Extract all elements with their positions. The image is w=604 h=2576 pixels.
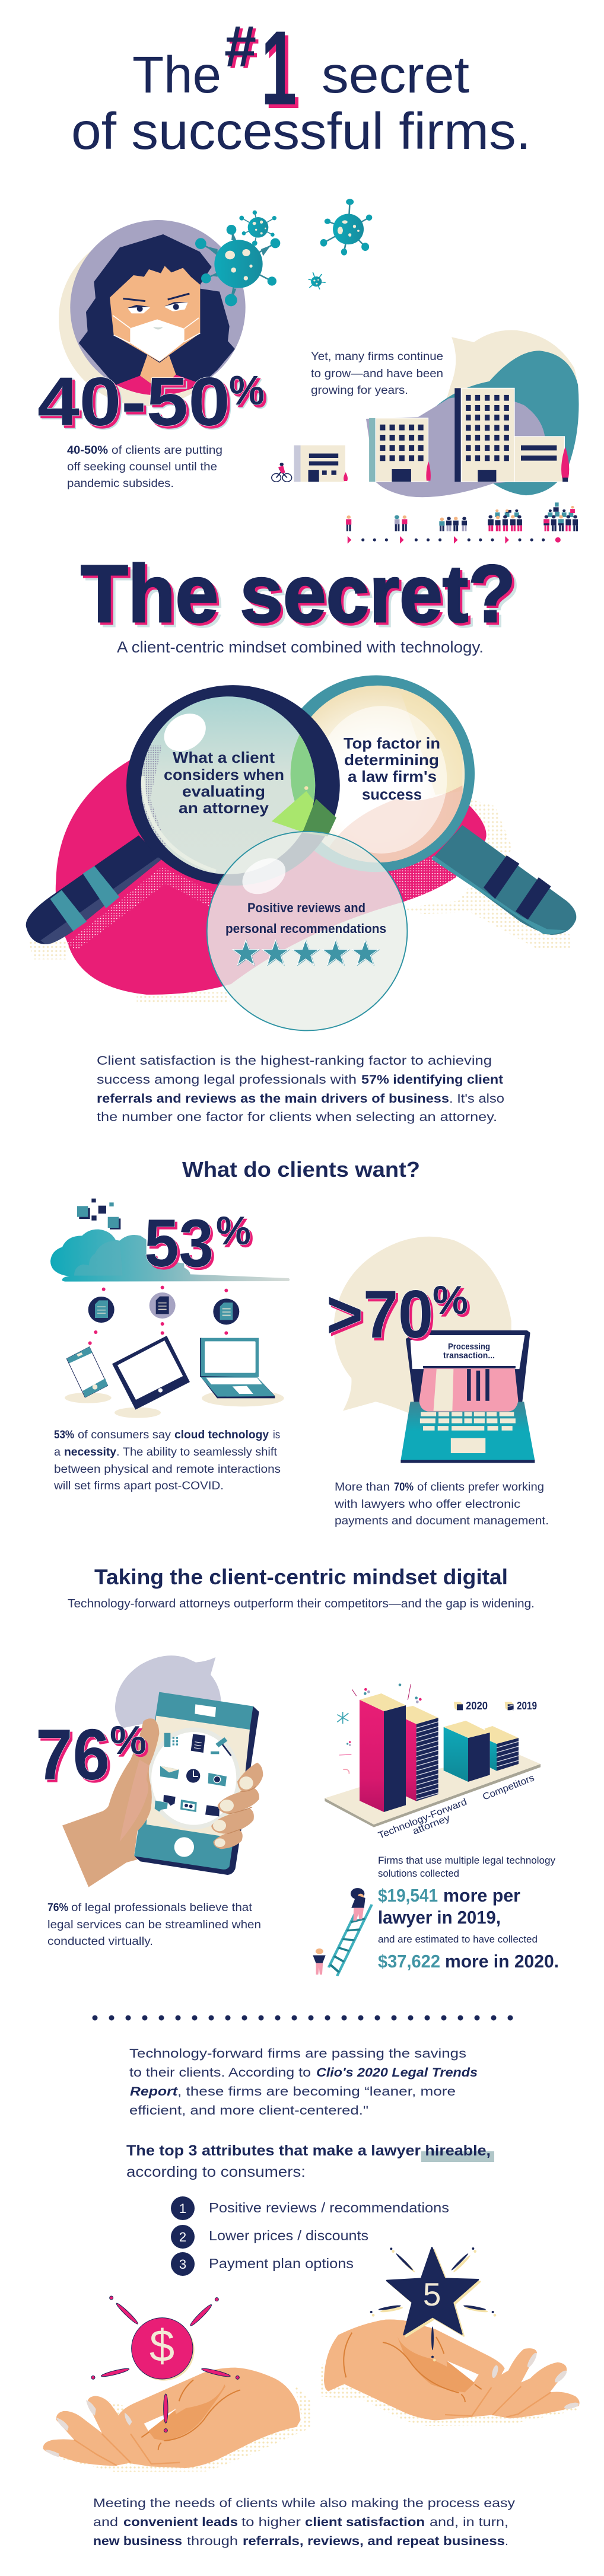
text: 70% of clients: of clients prefer working — [417, 1481, 544, 1494]
text: client satisfaction paragraph: . It's also — [449, 1092, 504, 1106]
text: collection amounts: lawyer in 2019, — [378, 1907, 501, 1928]
magnifier: right lens label — [344, 734, 440, 803]
icon: virus tiny — [309, 272, 326, 289]
illustration: woman in mask — [59, 220, 246, 406]
text: collection amounts: solutions collected — [378, 1868, 459, 1879]
magnifier: right lens label: a law firm's — [348, 768, 437, 785]
blob background — [29, 746, 570, 1002]
text: collection amounts: Firms that use multiple legal technology — [378, 1855, 555, 1866]
bar chart: collections 2019 vs 2020 — [325, 1683, 541, 1841]
magnifier: right lens label: success — [362, 785, 422, 803]
illustration: hand with star — [319, 2247, 580, 2426]
stat: >70%: % — [433, 1278, 468, 1323]
icon: phone — [65, 1347, 112, 1403]
text: client satisfaction paragraph: referrals and reviews as the main drivers of business — [97, 1092, 449, 1106]
heading: The secret?: The secret? — [81, 549, 516, 639]
text: 53% cloud technology: between physical and remote interactions — [54, 1463, 281, 1476]
text: closing paragraph: convenient leads — [123, 2515, 238, 2529]
magnifier: right lens — [276, 676, 576, 935]
text: closing paragraph: Meeting the needs of clients while also making the process easy — [93, 2497, 516, 2510]
text: 76% of legal professionals: 76% — [47, 1902, 68, 1914]
laptop screen label: Processing — [448, 1342, 490, 1352]
illustration: hand with coin — [43, 2296, 310, 2472]
illustration: hand holding phone — [36, 1655, 263, 1887]
text: firms continue to grow — [311, 351, 443, 397]
text: client satisfaction paragraph: Client satisfaction is the highest-ranking factor to achieving — [97, 1054, 492, 1068]
text: 70% of clients: 70% — [394, 1481, 414, 1494]
icon: dollar coin: $ — [150, 2321, 174, 2371]
title number one: 1 — [261, 9, 297, 127]
icon: cloud — [50, 1230, 290, 1282]
text: 53% cloud technology: will set firms apart post-COVID. — [53, 1480, 224, 1492]
icon: tablet — [112, 1336, 190, 1418]
speech bubble — [115, 1655, 221, 1728]
title hash mark: # — [224, 14, 256, 79]
text: closing paragraph — [93, 2497, 516, 2548]
text: closing paragraph: referrals, reviews, and repeat business — [243, 2534, 505, 2548]
laptop screen label — [443, 1342, 495, 1361]
icon: cyclist — [272, 463, 292, 482]
text: firms continue to grow: growing for years. — [311, 384, 408, 397]
legend swatches — [454, 1702, 514, 1710]
list: top 3 attributes — [171, 2196, 449, 2276]
text: collection amounts: and are estimated to have collected — [378, 1934, 538, 1945]
text: collection amounts: more in 2020. — [445, 1951, 559, 1972]
text: closing paragraph: through — [187, 2534, 238, 2548]
confetti marks — [337, 1683, 422, 1774]
heading: Taking the client-centric mindset digital: Taking the client-centric mindset digital — [94, 1565, 508, 1589]
text: collection amounts: $37,622 — [378, 1951, 440, 1972]
illustration: laptop payment — [326, 1237, 535, 1463]
legend labels: 2019 — [517, 1700, 537, 1712]
text: 70% of clients: with lawyers who offer electronic — [334, 1498, 520, 1511]
icon: virus large — [195, 225, 280, 306]
axis labels — [377, 1773, 536, 1841]
icon: floating chips — [77, 1199, 120, 1230]
stat: 40-50%: % — [229, 367, 265, 413]
legend labels: 2020 — [466, 1700, 488, 1712]
text: 53% cloud technology: . The ability to seamlessly shift — [116, 1446, 278, 1459]
axis labels: Competitors — [481, 1773, 536, 1803]
icon: virus small — [239, 211, 276, 246]
text: 76% of legal professionals — [47, 1902, 261, 1948]
bar: competitors 2020 — [444, 1721, 490, 1782]
speech bubble — [333, 1237, 511, 1413]
text: clients putting off counsel: off seeking counsel until the — [67, 461, 217, 473]
list: top 3 attributes: Lower prices / discounts — [209, 2228, 368, 2243]
magnifier: left lens — [26, 685, 340, 944]
list: top 3 attributes: 1 — [179, 2201, 186, 2216]
text: 70% of clients: More than — [335, 1481, 390, 1494]
text: 53% cloud technology — [53, 1429, 281, 1492]
bar: competitors 2019 — [485, 1726, 519, 1771]
text: 53% cloud technology: 53% — [54, 1429, 74, 1441]
stat: 76%: 76 — [36, 1714, 110, 1795]
magnifier: bottom lens label: Positive reviews and — [247, 900, 365, 915]
magnifier: bottom lens label — [225, 900, 386, 936]
text: savings paragraph — [129, 2047, 478, 2118]
text: clients putting off counsel: pandemic subsides. — [67, 477, 174, 490]
stat: >70%: >70 — [326, 1277, 433, 1352]
text: savings paragraph: Report — [130, 2085, 178, 2099]
text: savings paragraph: efficient, and more client-centered." — [129, 2104, 368, 2118]
text: client satisfaction paragraph: success among legal professionals with — [97, 1073, 357, 1087]
icon: person climbing ladder — [313, 1888, 372, 1976]
text: 53% cloud technology: is — [273, 1429, 280, 1441]
magnifier: right lens label: Top factor in — [344, 734, 440, 752]
text: client satisfaction paragraph — [97, 1054, 504, 1124]
magnifier: left lens label: evaluating — [182, 782, 265, 800]
magnifier: bottom lens — [207, 832, 407, 1030]
magnifier: left lens label: considers when — [164, 766, 284, 784]
list: top 3 attributes: Positive reviews / recommendations — [209, 2200, 449, 2215]
text: 53% cloud technology: of consumers say — [78, 1429, 171, 1441]
text: closing paragraph: and — [93, 2515, 118, 2529]
stat: 76%: % — [110, 1718, 147, 1763]
text: savings paragraph: , these firms are becoming “leaner, more — [177, 2085, 456, 2099]
icon: dollar coin — [91, 2296, 239, 2432]
title: of successful firms. — [71, 103, 531, 160]
text: client satisfaction paragraph: the number one factor for clients when selecting an attorney. — [97, 1110, 497, 1124]
text: savings paragraph: to their clients. According to — [129, 2066, 311, 2080]
icon: virus medium — [320, 199, 372, 255]
icon row: crowds of growing clients — [346, 502, 578, 531]
heading: top 3 attributes — [126, 2142, 494, 2180]
magnifier: left lens label: What a client — [173, 749, 275, 766]
magnifier: left lens label — [164, 749, 284, 817]
text: 53% cloud technology: necessity — [64, 1446, 116, 1459]
text: savings paragraph: Clio's 2020 Legal Trends — [316, 2066, 478, 2080]
subheading: client-centric mindset: A client-centric mindset combined with technology. — [117, 638, 484, 656]
list: top 3 attributes: 3 — [179, 2257, 186, 2272]
text: 70% of clients — [334, 1481, 549, 1527]
text: clients putting off counsel — [67, 444, 222, 490]
title — [71, 9, 531, 160]
text: closing paragraph: . — [505, 2534, 508, 2548]
magnifier: left lens label: an attorney — [179, 799, 269, 817]
title: secret — [322, 46, 469, 104]
text: 53% cloud technology: a — [54, 1446, 61, 1459]
list: top 3 attributes: 2 — [179, 2230, 186, 2244]
icon: hand — [62, 1718, 263, 1887]
list: top 3 attributes: Payment plan options — [209, 2256, 354, 2271]
icon: five star — [370, 2247, 496, 2361]
divider: dotted line — [93, 2015, 513, 2020]
laptop screen label: transaction... — [443, 1351, 495, 1361]
text: 53% cloud technology: cloud technology — [174, 1429, 269, 1441]
magnifier: bottom lens label: personal recommendations — [225, 921, 386, 936]
axis labels: attorney — [411, 1813, 452, 1837]
text: closing paragraph: client satisfaction — [305, 2515, 425, 2529]
axis labels: Technology-Forward — [377, 1797, 468, 1841]
magnifier: right lens label: determining — [344, 751, 439, 769]
illustration: growing firm buildings — [294, 330, 579, 497]
text: closing paragraph: to higher — [241, 2515, 301, 2529]
stat: 40-50%: 40-50 — [37, 363, 230, 440]
illustration: magnifying glasses venn diagram — [26, 676, 576, 1030]
icon: five star: 5 — [423, 2276, 441, 2313]
icon: phone — [134, 1692, 259, 1875]
heading: What do clients want?: What do clients want? — [182, 1157, 420, 1182]
text: collection amounts: $19,541 — [378, 1885, 438, 1906]
bar: attorneys 2020 — [360, 1693, 406, 1812]
text: 70% of clients: payments and document management. — [335, 1515, 549, 1527]
timeline dots and arrows — [348, 536, 561, 544]
text: clients putting off counsel: 40-50% — [67, 444, 108, 457]
icon: document circles — [88, 1286, 239, 1345]
icon: laptop — [200, 1338, 284, 1406]
heading: top 3 attributes: according to consumers: — [126, 2164, 306, 2180]
text: collection amounts — [378, 1855, 559, 1972]
heading: top 3 attributes: The top 3 attributes that make a lawyer hireable, — [126, 2142, 491, 2159]
text: collection amounts: more per — [443, 1885, 520, 1906]
illustration: cloud technology — [50, 1199, 290, 1418]
text: firms continue to grow: Yet, many firms continue — [311, 351, 443, 363]
text: clients putting off counsel: of clients are putting — [112, 444, 222, 457]
stat: 53%: % — [216, 1208, 251, 1253]
text: savings paragraph: Technology-forward firms are passing the savings — [129, 2047, 466, 2061]
text: closing paragraph: and, in turn, — [430, 2515, 508, 2529]
title: The — [132, 46, 221, 104]
subheading: technology-forward attorneys: Technology-forward attorneys outperform their competitors—and the gap is widening. — [68, 1597, 535, 1610]
bar: attorneys 2019 — [406, 1706, 438, 1801]
text: firms continue to grow: to grow—and have been — [311, 368, 443, 380]
text: 76% of legal professionals: of legal professionals believe that — [71, 1902, 253, 1914]
legend labels — [466, 1700, 537, 1712]
text: 76% of legal professionals: legal services can be streamlined when — [47, 1919, 261, 1931]
text: 76% of legal professionals: conducted virtually. — [47, 1935, 153, 1948]
stat: 53%: 53 — [144, 1206, 214, 1281]
text: closing paragraph: new business — [93, 2534, 182, 2548]
text: client satisfaction paragraph: 57% identifying client — [361, 1073, 503, 1087]
icon: laptop with card — [400, 1330, 535, 1463]
